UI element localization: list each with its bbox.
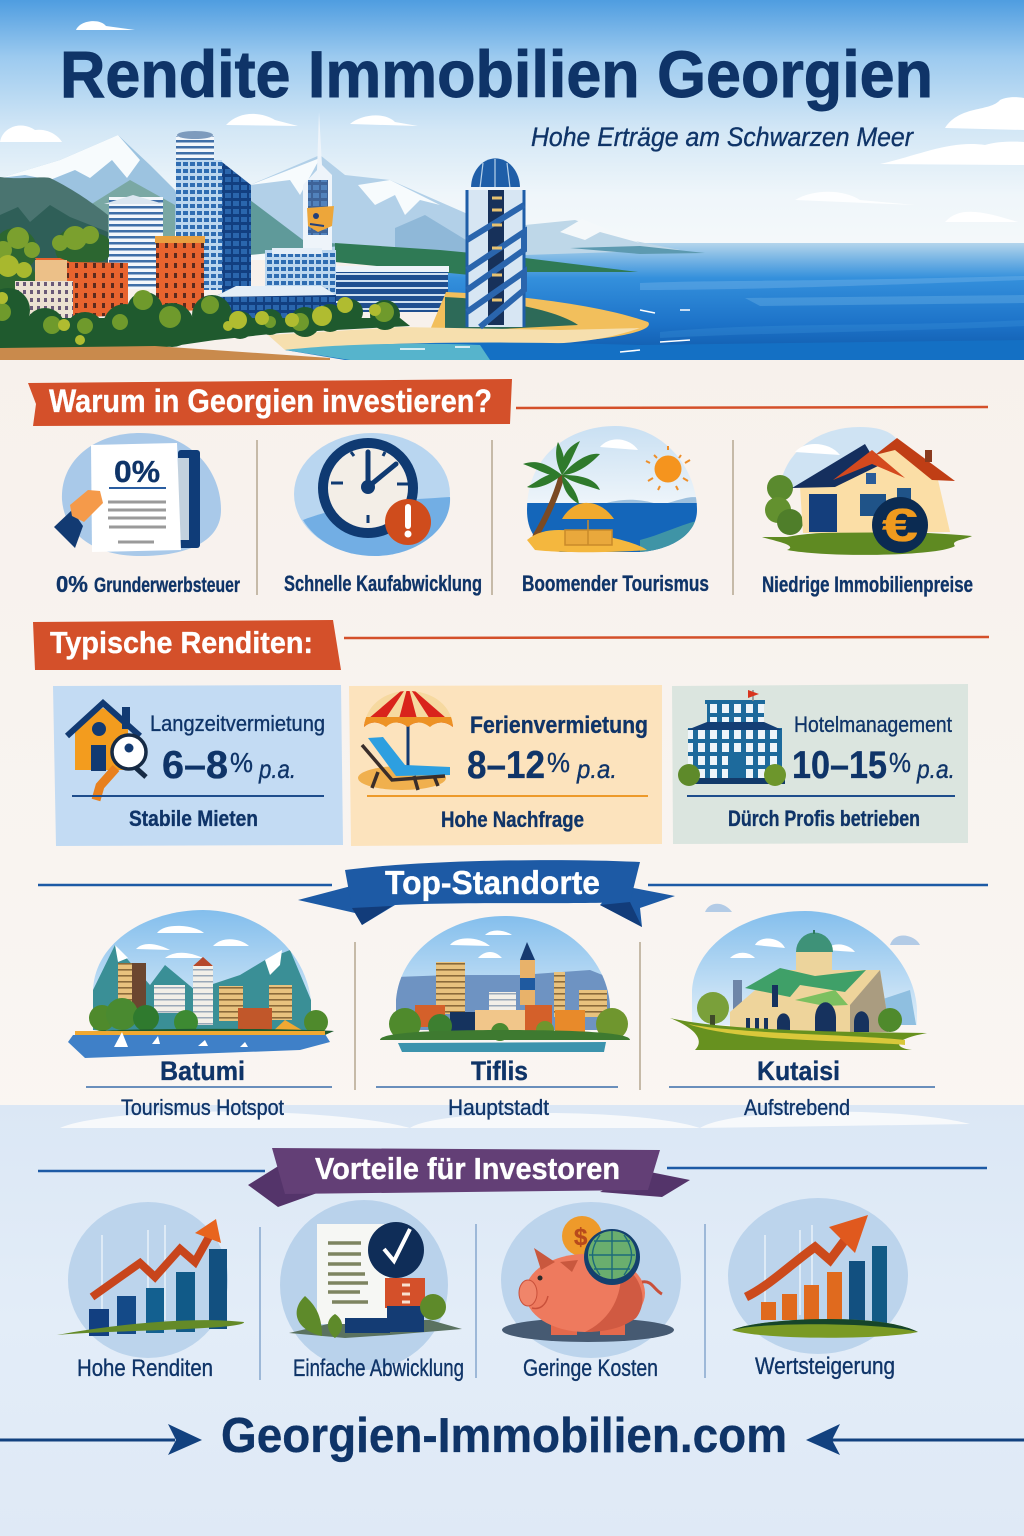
card: Hotelmanagement: 10–15 [792,744,887,787]
buildings [109,197,163,289]
benefit: Geringe Kosten [501,1202,681,1382]
card: Langzeitvermietung: p.a. [258,754,296,784]
benefit: Geringe Kosten: Geringe Kosten [523,1355,658,1382]
card: Ferienvermietung [349,685,662,846]
section: Typische Renditen [33,620,989,846]
glass office buildings [265,250,336,300]
location: Kutaisi [669,904,935,1120]
illustration: Tiflis skyline [380,910,630,1052]
heading ribbon [298,860,675,927]
card: Ferienvermietung: Ferienvermietung [470,712,648,739]
section: Warum in Georgien investieren?: Warum in Georgien investieren? [49,383,492,419]
section: Typische Renditen: Typische Renditen: [50,625,313,660]
illustration: Kutaisi cathedral [670,904,927,1050]
heading ribbon [28,379,512,426]
heading ribbon [33,620,341,670]
card: Langzeitvermietung [53,685,343,846]
dark green hills [0,177,108,280]
card: Ferienvermietung: p.a. [576,754,617,784]
card: Langzeitvermietung: Stabile Mieten [129,806,258,831]
benefit: Hohe Renditen: Hohe Renditen [77,1355,213,1382]
icon: house with euro coin [762,427,972,555]
beach and land [430,292,649,341]
location: Kutaisi: Aufstrebend [744,1095,850,1120]
benefit: Einfache Abwicklung: Einfache Abwicklung [293,1355,464,1382]
footer website link: Georgien-Immobilien.com [221,1409,787,1463]
card: Hotelmanagement: p.a. [916,754,955,784]
card: Hotelmanagement: % [889,747,911,778]
title: Rendite Immobilien Georgien [60,37,933,111]
icon: hotel building [678,690,786,786]
location: Tiflis [376,910,630,1120]
distant mountains [0,135,190,240]
card: Langzeitvermietung: % [230,747,253,778]
icon: piggy bank with coin and globe [501,1202,681,1358]
icon: parasol and deck chair [358,691,453,790]
heading ribbon: Top-Standorte [385,864,600,901]
card: Ferienvermietung: % [547,747,570,778]
location: Kutaisi: Kutaisi [757,1056,840,1086]
icon: tax document [54,433,221,556]
benefit: Hohe Renditen [57,1202,244,1382]
label: 0% [56,571,88,597]
icon: tax document: 0% [114,454,160,489]
card: Ferienvermietung: 8–12 [467,744,545,787]
card: Hotelmanagement: Dürch Profis betrieben [728,806,920,831]
arrow: right pointing left [806,1424,1024,1455]
location: Batumi: Tourismus Hotspot [121,1095,284,1120]
subtitle: Hohe Erträge am Schwarzen Meer [531,122,914,152]
heading ribbon [248,1148,690,1207]
icon: rising chart [57,1202,244,1358]
Alphabet tower [467,158,524,327]
arrow: left pointing right [0,1424,202,1455]
location: Tiflis: Hauptstadt [448,1095,549,1120]
trees behind the buildings [0,226,112,311]
hero illustration: Batumi skyline and Black Sea [0,0,1024,360]
section: Vorteile für Investoren [38,1148,987,1382]
label: Boomender Tourismus [522,571,709,596]
benefit: Einfache Abwicklung [280,1200,464,1382]
card: Langzeitvermietung: Langzeitvermietung [150,711,325,736]
icon: document with check badge [280,1200,462,1370]
section: Warum in Georgien investieren? [28,379,988,597]
label: Schnelle Kaufabwicklung [284,571,482,596]
icon: beach with palm tree [523,426,697,552]
benefit: Wertsteigerung [728,1198,918,1380]
illustration: Batumi skyline [68,905,334,1058]
location: Tiflis: Tiflis [471,1056,528,1086]
icon: clock with alert [294,433,450,556]
location: Batumi: Batumi [160,1056,245,1086]
coastal trees [0,288,410,352]
left shore [0,346,330,360]
icon: house with euro coin: € [882,499,918,551]
icon: value growth chart [728,1198,918,1354]
section: Warum in Georgien investieren?: Grunderwerbsteuer [94,574,240,597]
spire tower [303,112,332,255]
icon: house and key [67,703,146,800]
section: Top-Standorte [38,860,988,1120]
card: Hotelmanagement: Hotelmanagement [794,712,952,737]
sky clouds [0,21,1024,222]
heading ribbon: Vorteile für Investoren [315,1151,620,1186]
card: Ferienvermietung: Hohe Nachfrage [441,807,584,832]
icon: piggy bank with coin and globe: $ [574,1224,588,1251]
location: Batumi [68,905,334,1120]
benefit: Wertsteigerung: Wertsteigerung [755,1353,895,1380]
card: Langzeitvermietung: 6–8 [162,744,228,787]
card: Hotelmanagement [672,684,968,844]
